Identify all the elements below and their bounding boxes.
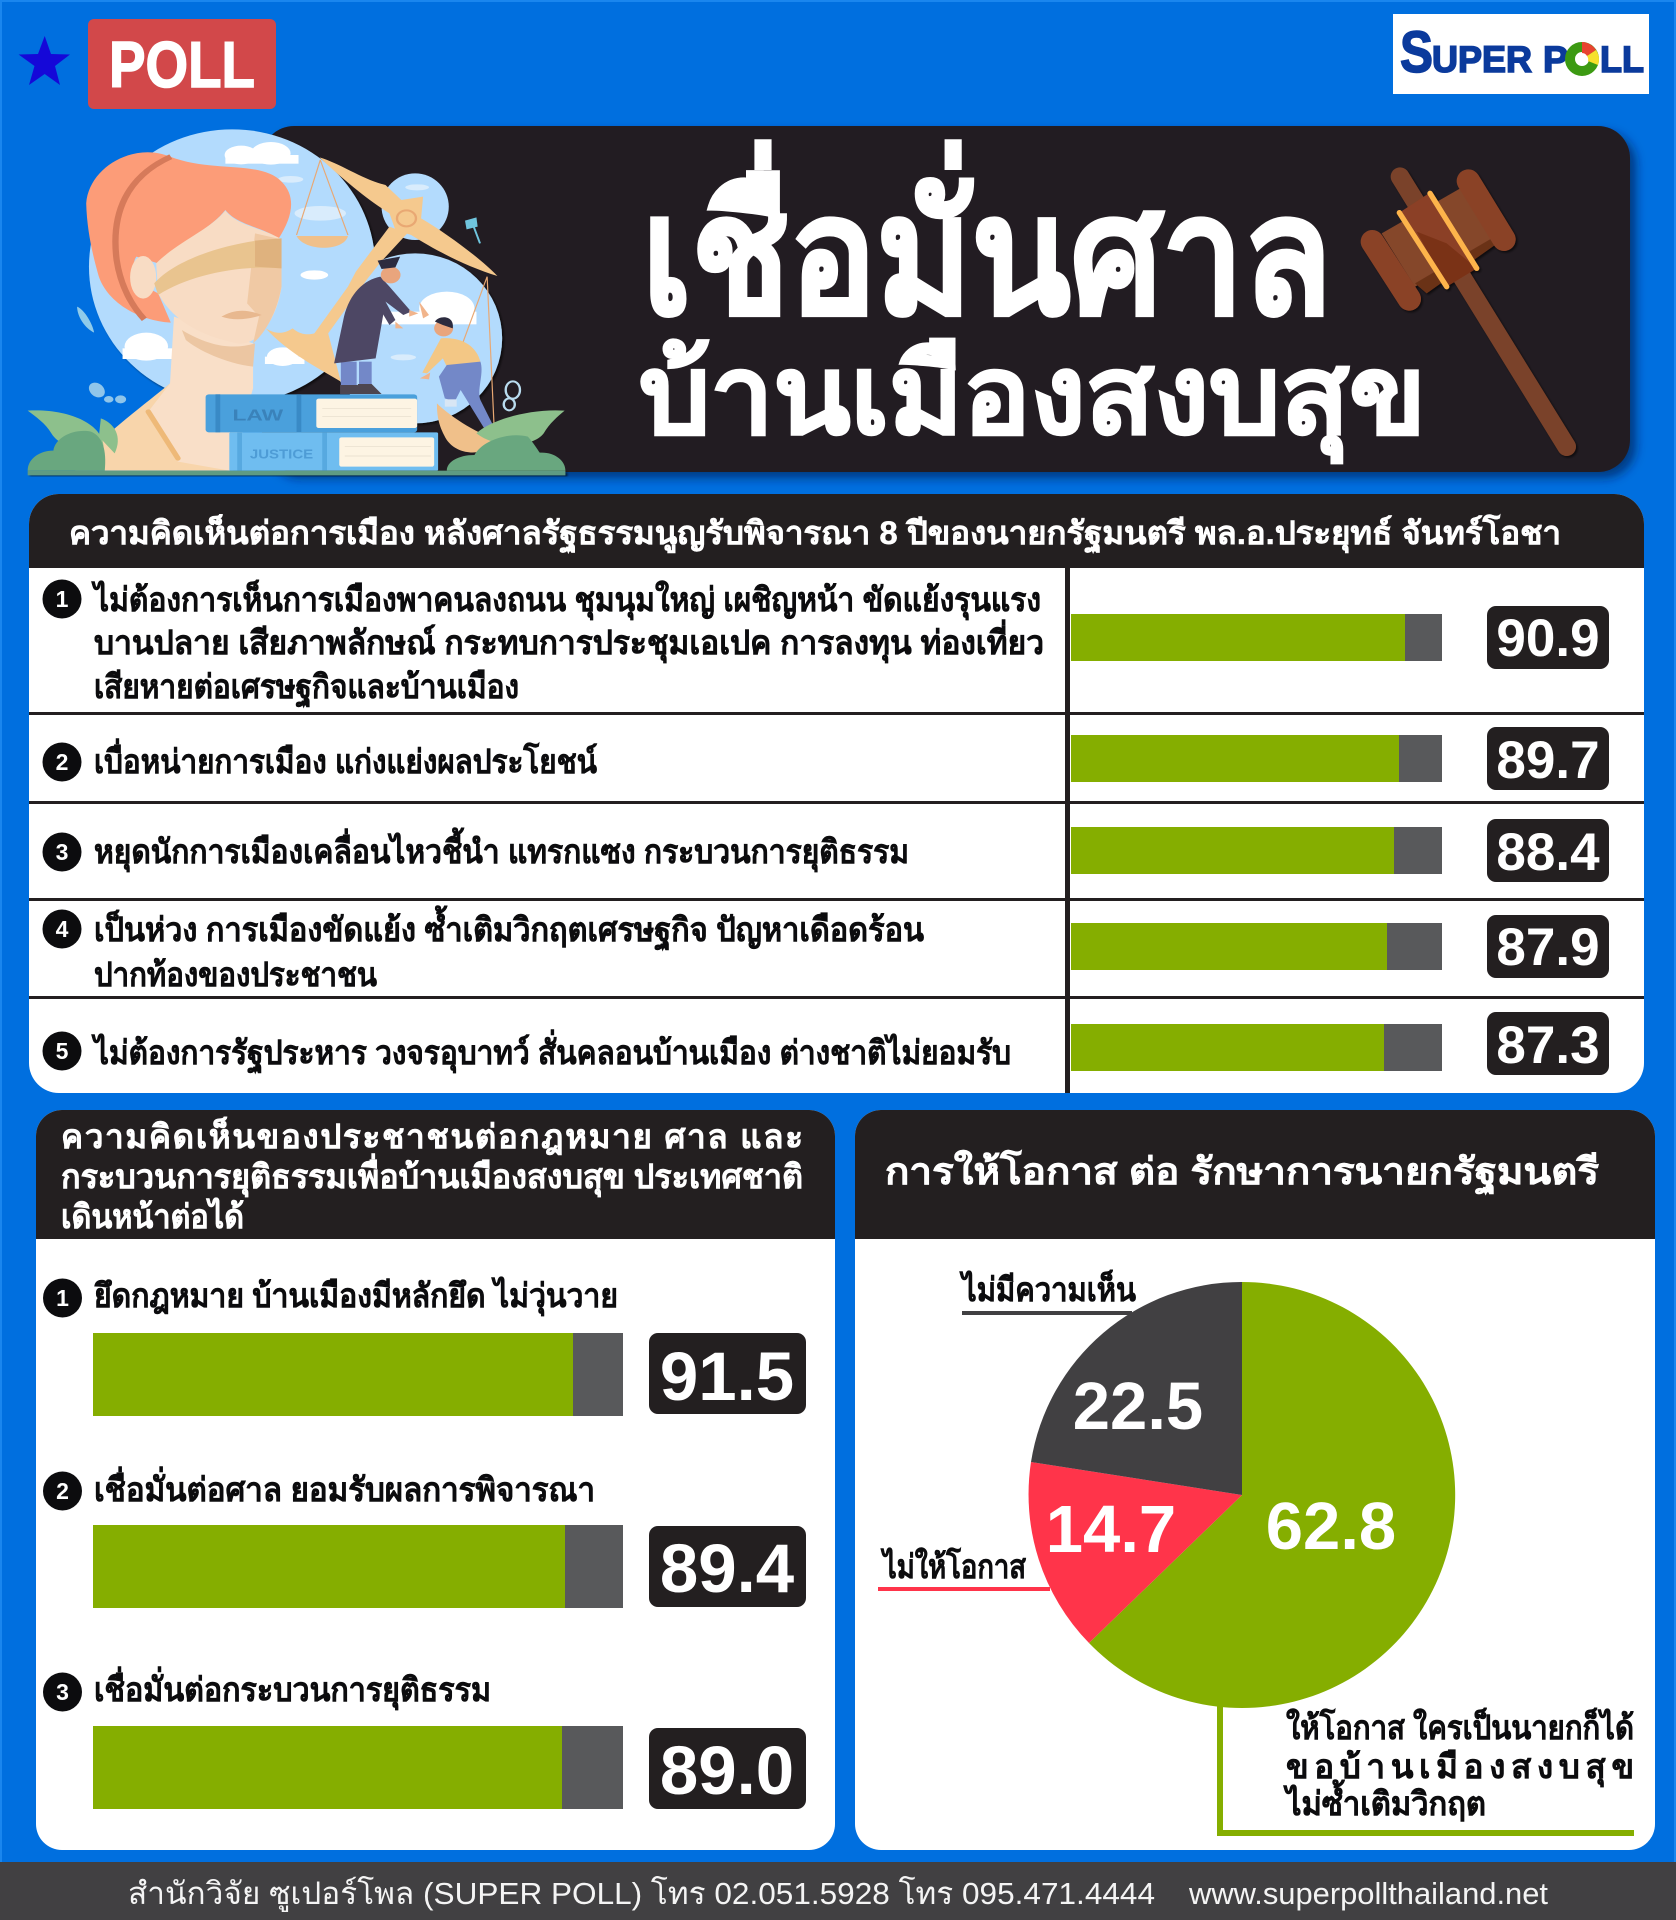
big sky circle	[89, 129, 375, 404]
row 2 value: 89.7	[1496, 731, 1600, 790]
panel: giving a chance to acting PM	[855, 1110, 1655, 1850]
row 2 text: เบื่อหน่ายการเมือง แก่งแย่งผลประโยชน์	[94, 738, 597, 780]
left panel header	[36, 1110, 835, 1239]
item 2 value: 89.4	[660, 1530, 794, 1607]
bust: shirt	[75, 383, 253, 471]
footer: www.superpollthailand.net	[1188, 1876, 1548, 1911]
item 2 label: เชื่อมั่นต่อศาล ยอมรับผลการพิจารณา	[94, 1466, 595, 1508]
logo: Super Poll: UPER	[1432, 39, 1532, 80]
lips	[221, 311, 262, 319]
pie chart: 22.5	[1073, 1369, 1203, 1444]
scale post and hand	[266, 227, 407, 382]
logo: Super Poll: LL	[1600, 39, 1644, 80]
row 1 text	[42, 579, 1044, 708]
pie chart	[1029, 1282, 1455, 1708]
callout text: give a chance	[1283, 1707, 1634, 1822]
footer	[0, 1862, 1676, 1920]
small props: feather, footprints, gavel, handcuffs	[77, 217, 520, 410]
row 4 text: ปากท้องของประชาชน	[94, 956, 377, 993]
left panel heading text	[61, 1116, 803, 1235]
books	[206, 394, 438, 471]
row 3 value: 88.4	[1496, 823, 1600, 882]
row 1 text: 1	[56, 586, 69, 612]
right panel header	[855, 1110, 1655, 1239]
ear	[130, 256, 156, 299]
blindfold	[154, 238, 282, 295]
item 3 bar	[93, 1726, 623, 1809]
row 1 text: บานปลาย เสียภาพลักษณ์ กระทบการประชุมเอเปค การลงทุน ท่องเที่ยว	[94, 619, 1044, 664]
table header	[29, 494, 1644, 568]
left panel heading text: กระบวนการยุติธรรมเพื่อบ้านเมืองสงบสุข ประเทศชาติ	[61, 1153, 803, 1198]
row 4 text: 4	[56, 916, 69, 942]
item 1 bar	[93, 1333, 623, 1416]
row 4 value: 87.9	[1496, 918, 1600, 977]
item 3 value: 89.0	[660, 1732, 794, 1809]
ground strip	[28, 471, 565, 475]
row 1 text: เสียหายต่อเศรษฐกิจและบ้านเมือง	[94, 668, 519, 708]
icon: gavel	[1372, 177, 1567, 447]
label: no chance: ไม่ให้โอกาส	[881, 1547, 1027, 1585]
bust: neck	[148, 317, 253, 471]
figure: graduate	[334, 257, 418, 394]
hair	[86, 152, 291, 323]
label: no opinion: ไม่มีความเห็น	[959, 1269, 1136, 1308]
panel: law and justice opinions	[36, 1110, 835, 1850]
row 4 text	[42, 905, 924, 993]
pie chart: 62.8	[1266, 1489, 1396, 1564]
row 1 text: ไม่ต้องการเห็นการเมืองพาคนลงถนน ชุมนุมใหญ่ เผชิญหน้า ขัดแย้งรุนแรง	[91, 579, 1041, 621]
left panel heading text: ความคิดเห็นของประชาชนต่อกฎหมาย ศาล และ	[61, 1116, 803, 1155]
books: JUSTICE	[250, 446, 313, 461]
table heading text: ความคิดเห็นต่อการเมือง หลังศาลรัฐธรรมนูญรับพิจารณา 8 ปีของนายกรัฐมนตรี พล.อ.ประยุทธ์ จันทร์โอชา	[69, 513, 1561, 554]
row 2 text: 2	[56, 749, 68, 775]
title line 1: เชื่อมั่นศาล	[642, 140, 1332, 348]
pie chart: 14.7	[1046, 1492, 1176, 1567]
item 1 value: 91.5	[660, 1338, 794, 1415]
item 1 label: ยึดกฎหมาย บ้านเมืองมีหลักยึด ไม่วุ่นวาย	[94, 1276, 618, 1317]
badge: POLL: POLL	[109, 28, 255, 101]
title line 2: บ้านเมืองสงบสุข	[639, 334, 1426, 464]
row 4 bar	[1071, 923, 1442, 970]
third sky circle	[328, 253, 502, 423]
row 5 text: 5	[56, 1038, 69, 1064]
figure: student	[419, 302, 503, 439]
row 1 bar	[1071, 614, 1442, 661]
logo: Super Poll	[1393, 14, 1649, 94]
right scale strings and pan	[463, 277, 494, 430]
icon: star	[19, 36, 70, 85]
panel: opinion table	[29, 494, 1644, 1093]
leaves	[28, 410, 565, 471]
row 3 text: 3	[56, 839, 68, 865]
row 3 bar	[1071, 827, 1442, 874]
scale beam	[319, 157, 497, 276]
clouds	[123, 142, 476, 366]
item 2 bar	[93, 1525, 623, 1608]
item 3 label	[43, 1666, 491, 1712]
logo: Super Poll: S	[1400, 20, 1433, 85]
item 1 label: 1	[56, 1285, 69, 1311]
callout text: give a chance: ไม่ซ้ำเติมวิกฤต	[1283, 1779, 1486, 1822]
callout line: green	[1220, 1700, 1634, 1833]
row 5 text: ไม่ต้องการรัฐประหาร วงจรอุบาทว์ สั่นคลอนบ้านเมือง ต่างชาติไม่ยอมรับ	[91, 1029, 1011, 1074]
item 3 label: เชื่อมั่นต่อกระบวนการยุติธรรม	[94, 1666, 491, 1711]
books: LAW	[232, 406, 284, 424]
small sky circle	[382, 173, 449, 240]
row 5 value: 87.3	[1496, 1016, 1600, 1075]
right panel heading text: การให้โอกาส ต่อ รักษาการนายกรัฐมนตรี	[885, 1149, 1599, 1195]
face	[156, 211, 282, 344]
title panel	[262, 126, 1630, 472]
callout text: give a chance: ขอบ้านเมืองสงบสุข	[1286, 1748, 1634, 1788]
row 5 bar	[1071, 1024, 1442, 1071]
hair band	[115, 157, 171, 319]
footer: สำนักวิจัย ซูเปอร์โพล (SUPER POLL) โทร 02.051.5928 โทร 095.471.4444	[128, 1876, 1155, 1912]
row 3 text: หยุดนักการเมืองเคลื่อนไหวชี้นำ แทรกแซง กระบวนการยุติธรรม	[94, 827, 909, 873]
item 2 label: 2	[56, 1478, 69, 1504]
illustration: blind justice with scales, books and figures	[28, 129, 565, 475]
row 1 value: 90.9	[1496, 609, 1600, 668]
row 4 text: เป็นห่วง การเมืองขัดแย้ง ซ้ำเติมวิกฤตเศรษฐกิจ ปัญหาเดือดร้อน	[94, 905, 924, 951]
left panel heading text: เดินหน้าต่อได้	[61, 1197, 244, 1235]
item 3 label: 3	[56, 1679, 69, 1705]
left scale pan	[297, 160, 348, 235]
row 2 bar	[1071, 735, 1442, 782]
logo: Super Poll: P	[1543, 39, 1568, 80]
callout text: give a chance: ให้โอกาส ใครเป็นนายกก็ได้	[1286, 1707, 1634, 1746]
